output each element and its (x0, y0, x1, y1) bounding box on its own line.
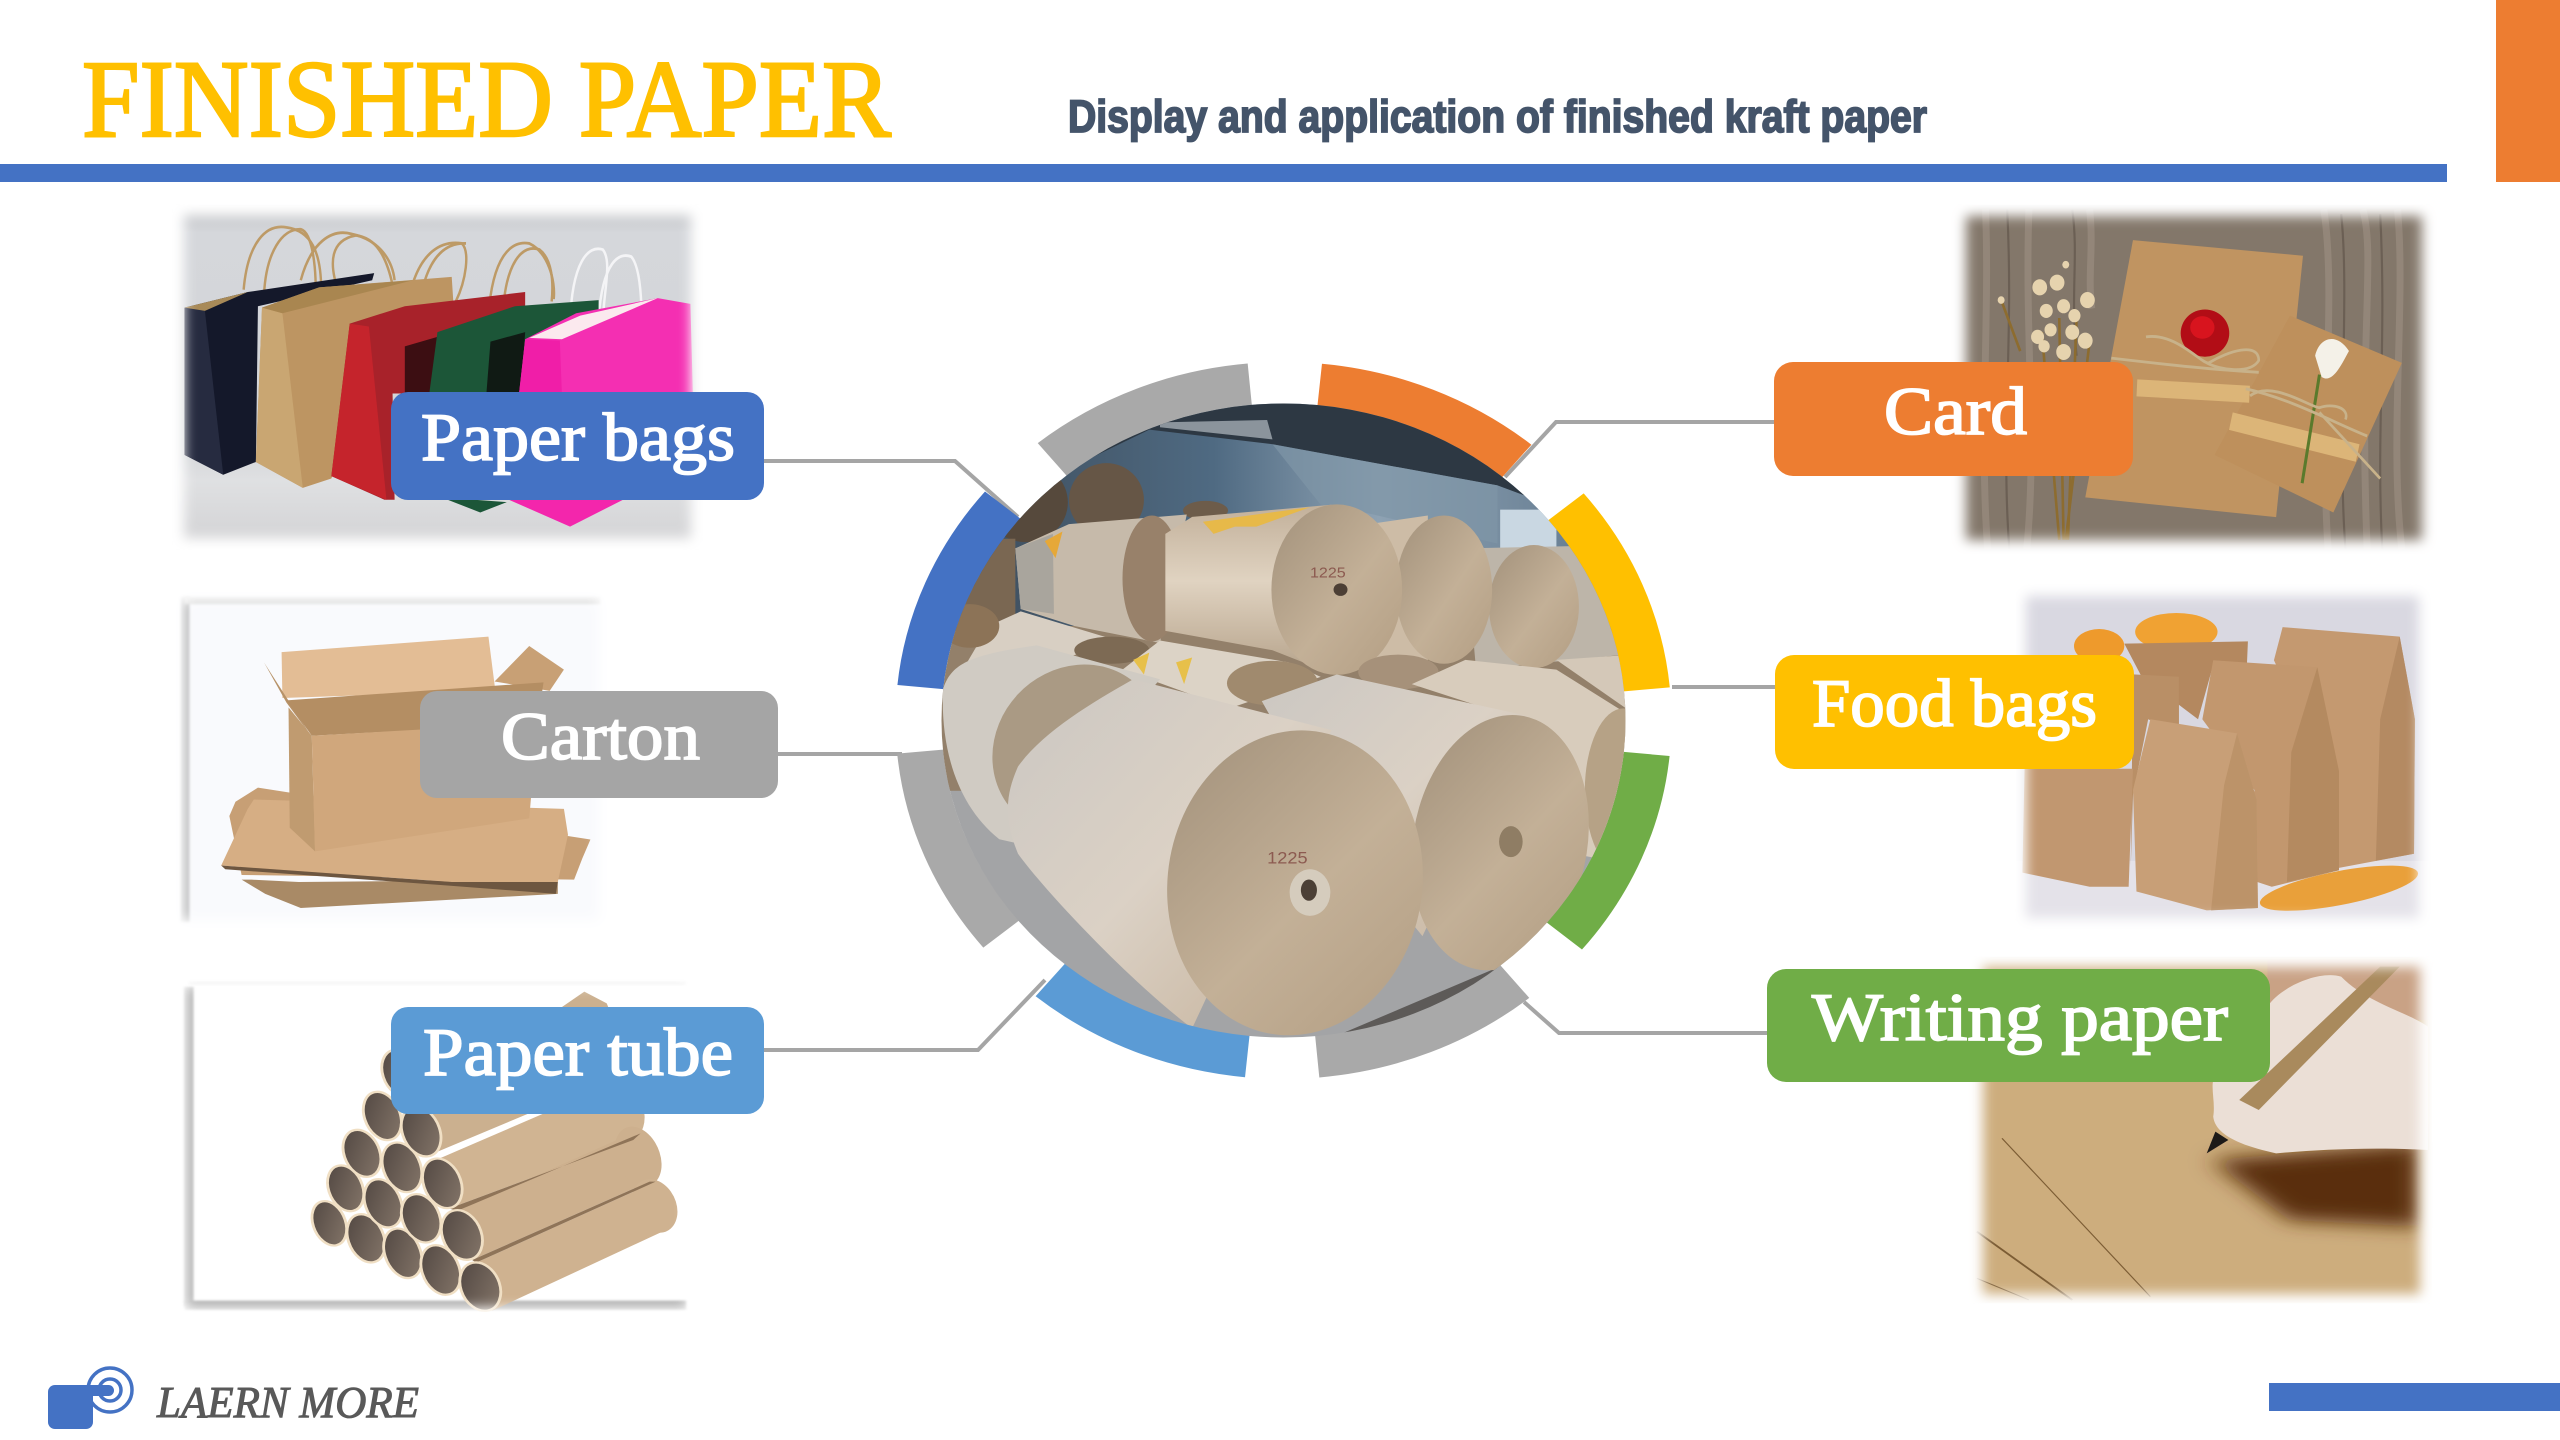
label: writing paper: Writing paper (1812, 979, 2228, 1055)
right low rolls (1412, 655, 1662, 873)
label: card: Card (1884, 373, 2027, 449)
dried flower bouquet (1998, 261, 2095, 540)
label: paper bags: Paper bags (421, 399, 735, 475)
tube bodies (417, 992, 684, 1311)
mid rolls (940, 604, 1439, 708)
title: FINISHED PAPER (82, 38, 892, 160)
tube ends (306, 1046, 507, 1315)
photo: carton (172, 589, 611, 929)
header bar (0, 164, 2447, 182)
floor (947, 777, 1616, 1038)
footer bar (2269, 1383, 2560, 1411)
baguette (2260, 866, 2418, 911)
upper left roll (1015, 514, 1187, 643)
corner block (2496, 0, 2560, 182)
bag: rear left (2022, 769, 2133, 887)
photo: writing paper (1968, 957, 2432, 1303)
label: carton: Carton (501, 698, 700, 774)
envelope: large (2085, 240, 2303, 517)
connector: writing paper (1524, 1002, 1768, 1033)
central photo: paper rolls (942, 404, 1626, 1038)
bag: rear right (2274, 627, 2415, 868)
bag: middle (2202, 660, 2339, 887)
red rose (2181, 310, 2229, 357)
label: writing paper (1767, 969, 2270, 1082)
rear dark rolls (940, 463, 1228, 631)
bag: pink (509, 298, 693, 527)
connector: food bags (1672, 685, 1775, 689)
hand shadow (2211, 1143, 2419, 1227)
connector: card (1505, 422, 1775, 477)
rear left roll (943, 643, 1188, 856)
label: card (1774, 362, 2133, 476)
label: food bags (1775, 655, 2134, 769)
upper roll 3 (1465, 545, 1621, 670)
front right roll (1262, 674, 1606, 981)
front roll (1008, 679, 1437, 1045)
photo: paper bags (172, 205, 703, 549)
upper roll 1: 1225 (1310, 565, 1346, 581)
bag: kraft (256, 277, 454, 488)
label: paper tube (391, 1007, 764, 1114)
pen (2207, 967, 2400, 1153)
connector: carton (777, 752, 902, 756)
front roll: 1225 (1267, 848, 1308, 867)
flat cartons (221, 788, 590, 908)
label: food bags: Food bags (1812, 665, 2097, 741)
bag: front (2133, 719, 2258, 910)
photo: card (1951, 205, 2437, 554)
bag: green (429, 300, 599, 512)
icon: pointing hand with target (48, 1368, 132, 1429)
label: paper bags (391, 392, 764, 500)
label: carton (420, 691, 778, 798)
upper roll 1 (1165, 504, 1402, 675)
wall (956, 404, 1612, 630)
tan base behind rolls (914, 626, 1664, 791)
box (282, 637, 495, 698)
bag: red (331, 292, 525, 500)
upper roll 2 (1369, 515, 1492, 670)
photo: paper tube (183, 986, 687, 1312)
bread (2074, 613, 2218, 656)
footer text: LAERN MORE (156, 1378, 419, 1427)
subtitle: Display and application of finished kraft paper (1068, 91, 1927, 142)
label: paper tube: Paper tube (423, 1014, 733, 1090)
paper crease lines (1977, 1138, 2150, 1300)
bag: navy (184, 273, 374, 475)
hand (2213, 975, 2428, 1153)
segmented ring (920, 385, 1647, 1056)
white lily (2302, 339, 2349, 483)
connector: paper tube (764, 980, 1045, 1050)
photo: food bags (2016, 585, 2432, 929)
connector: paper bags (764, 461, 1018, 517)
envelope: small (2279, 318, 2402, 512)
